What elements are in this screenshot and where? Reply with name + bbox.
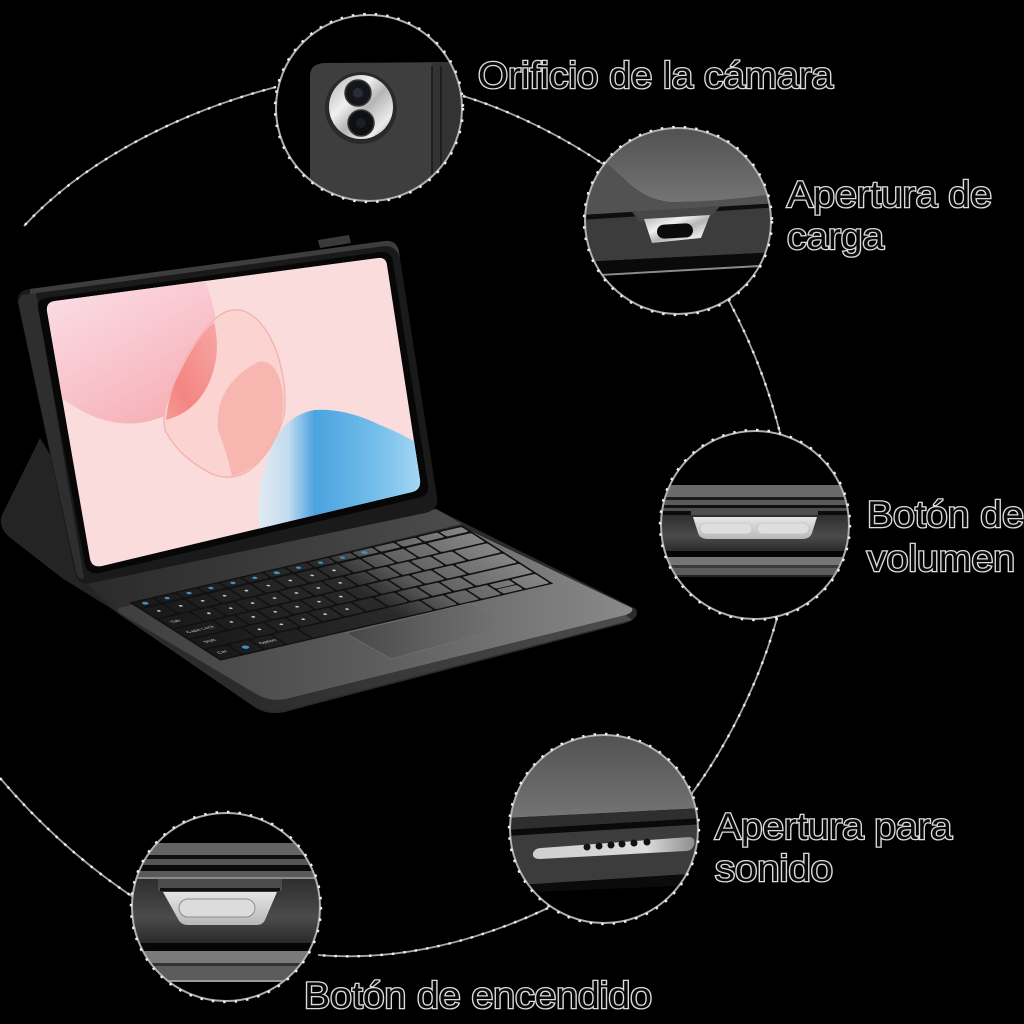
connector lines <box>0 87 780 956</box>
label: charging opening <box>787 174 992 257</box>
keyboard keys <box>129 525 553 661</box>
speaker holes <box>584 838 650 850</box>
detail circle: power button <box>125 843 325 982</box>
label: volume button: Botón de <box>867 494 1024 535</box>
label: sound opening <box>715 806 952 889</box>
label: power button: Botón de encendido <box>304 975 652 1016</box>
camera circle outline <box>275 14 463 202</box>
volume rocker <box>693 517 817 539</box>
label: camera hole: Orificio de la cámara <box>478 55 833 96</box>
label: volume button <box>867 494 1024 579</box>
label: charging opening: Apertura de <box>787 174 992 215</box>
volume circle outline <box>660 430 850 620</box>
detail circle: sound opening <box>511 736 697 892</box>
keyboard base <box>85 509 637 713</box>
detail circle: volume button <box>655 485 855 577</box>
label: volume button: volumen <box>867 538 1015 579</box>
label: sound opening: sonido <box>715 848 833 889</box>
touchpad <box>346 603 514 659</box>
power circle outline <box>131 812 321 1002</box>
case stand flap <box>1 438 135 614</box>
pink sphere <box>40 278 218 423</box>
translucent coral blob <box>164 310 285 477</box>
tablet body <box>18 235 437 584</box>
tablet screen wallpaper <box>40 250 430 575</box>
label: charging opening: carga <box>787 216 884 257</box>
detail circle: charging port <box>586 129 770 276</box>
blue blob <box>258 410 420 528</box>
detail circle: camera hole <box>310 62 461 200</box>
power key <box>163 892 277 925</box>
sound circle outline <box>509 734 699 924</box>
USB-C port <box>644 215 710 243</box>
camera module <box>325 72 397 144</box>
charging circle outline <box>584 127 772 315</box>
label: sound opening: Apertura para <box>715 806 952 847</box>
tablet with keyboard case <box>1 235 637 713</box>
